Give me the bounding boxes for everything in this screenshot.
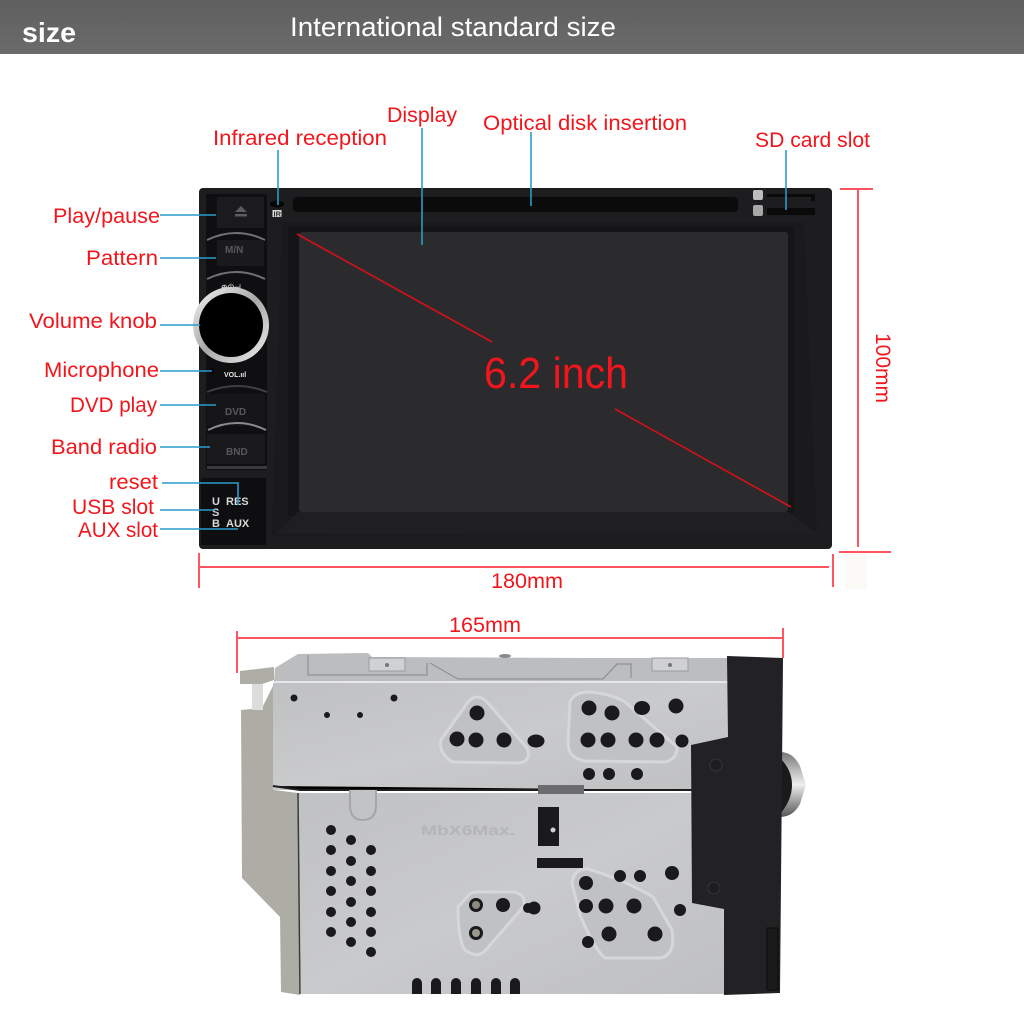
mounting holes [290,694,688,994]
callout: Pattern [86,247,216,270]
button: M/N: M/N [225,245,243,256]
header title: International standard size [290,12,616,42]
callout: Optical disk insertion: Optical disk insertion [483,112,687,135]
volume knob [193,287,269,363]
callout: Microphone: Microphone [44,359,159,382]
dimension: 165mm depth: 165mm [449,614,521,637]
header bar [0,0,1024,54]
diagonal size label: 6.2 inch [484,349,628,398]
callout: DVD play: DVD play [70,394,157,417]
infrared sensor: IR [274,210,282,218]
dimension: 100mm height [839,189,894,552]
upper chassis panel [273,683,729,790]
port cover: RES [226,496,249,508]
button column: VOL.ııl [224,372,246,379]
disc slot [293,197,738,212]
knob seen from side [780,752,806,817]
infrared sensor [270,200,284,218]
button column: ⊕⏻⊣ [221,283,241,292]
button: M/N [217,240,264,266]
port cover: AUX [226,518,250,530]
left bracket [241,684,300,995]
port cover: U [212,496,220,508]
port cover: S [212,507,219,519]
callout: Play/pause: Play/pause [53,205,160,228]
callout: Display: Display [387,104,458,127]
button column [206,194,267,470]
callout: SD card slot [755,129,870,210]
dimension: 100mm height: 100mm [871,333,894,403]
embossed model text: MbX6Max. [421,822,515,838]
callout: Infrared reception: Infrared reception [213,127,387,150]
dimension: 165mm depth [237,614,783,673]
dimension: 180mm width [199,553,833,593]
callout: reset: reset [109,471,158,494]
callout: AUX slot: AUX slot [78,519,158,542]
callouts [29,104,870,542]
button: BND: BND [226,447,248,458]
callout: reset [109,471,238,505]
button: eject [217,197,264,228]
upper stamped plate: left [440,697,528,763]
front panel of the head unit [193,188,832,549]
callout: Volume knob: Volume knob [29,310,157,333]
callout: USB slot: USB slot [72,496,154,519]
button: BND [207,434,265,464]
port cover [201,478,266,545]
SD card slot [753,190,815,216]
lower stamped plate: left [458,892,524,955]
lower stamped plate: right [572,869,673,958]
callout: Pattern: Pattern [86,247,158,270]
black front housing [691,656,783,995]
dimension: 180mm width: 180mm [491,570,563,593]
off-white patch below panel corner [845,553,867,589]
side view of the head unit [240,653,806,995]
upper stamped plate: right [568,692,677,762]
top rim [274,653,729,682]
screen diagonal [297,234,791,507]
button: DVD: DVD [225,407,246,418]
button: DVD [207,394,265,426]
lower chassis panel [298,793,725,994]
callout: SD card slot: SD card slot [755,129,870,152]
header label: size: size [22,17,76,48]
callout: Band radio: Band radio [51,436,157,459]
port cover: B [212,518,220,530]
screen [299,232,788,512]
screen bezel [272,222,817,536]
